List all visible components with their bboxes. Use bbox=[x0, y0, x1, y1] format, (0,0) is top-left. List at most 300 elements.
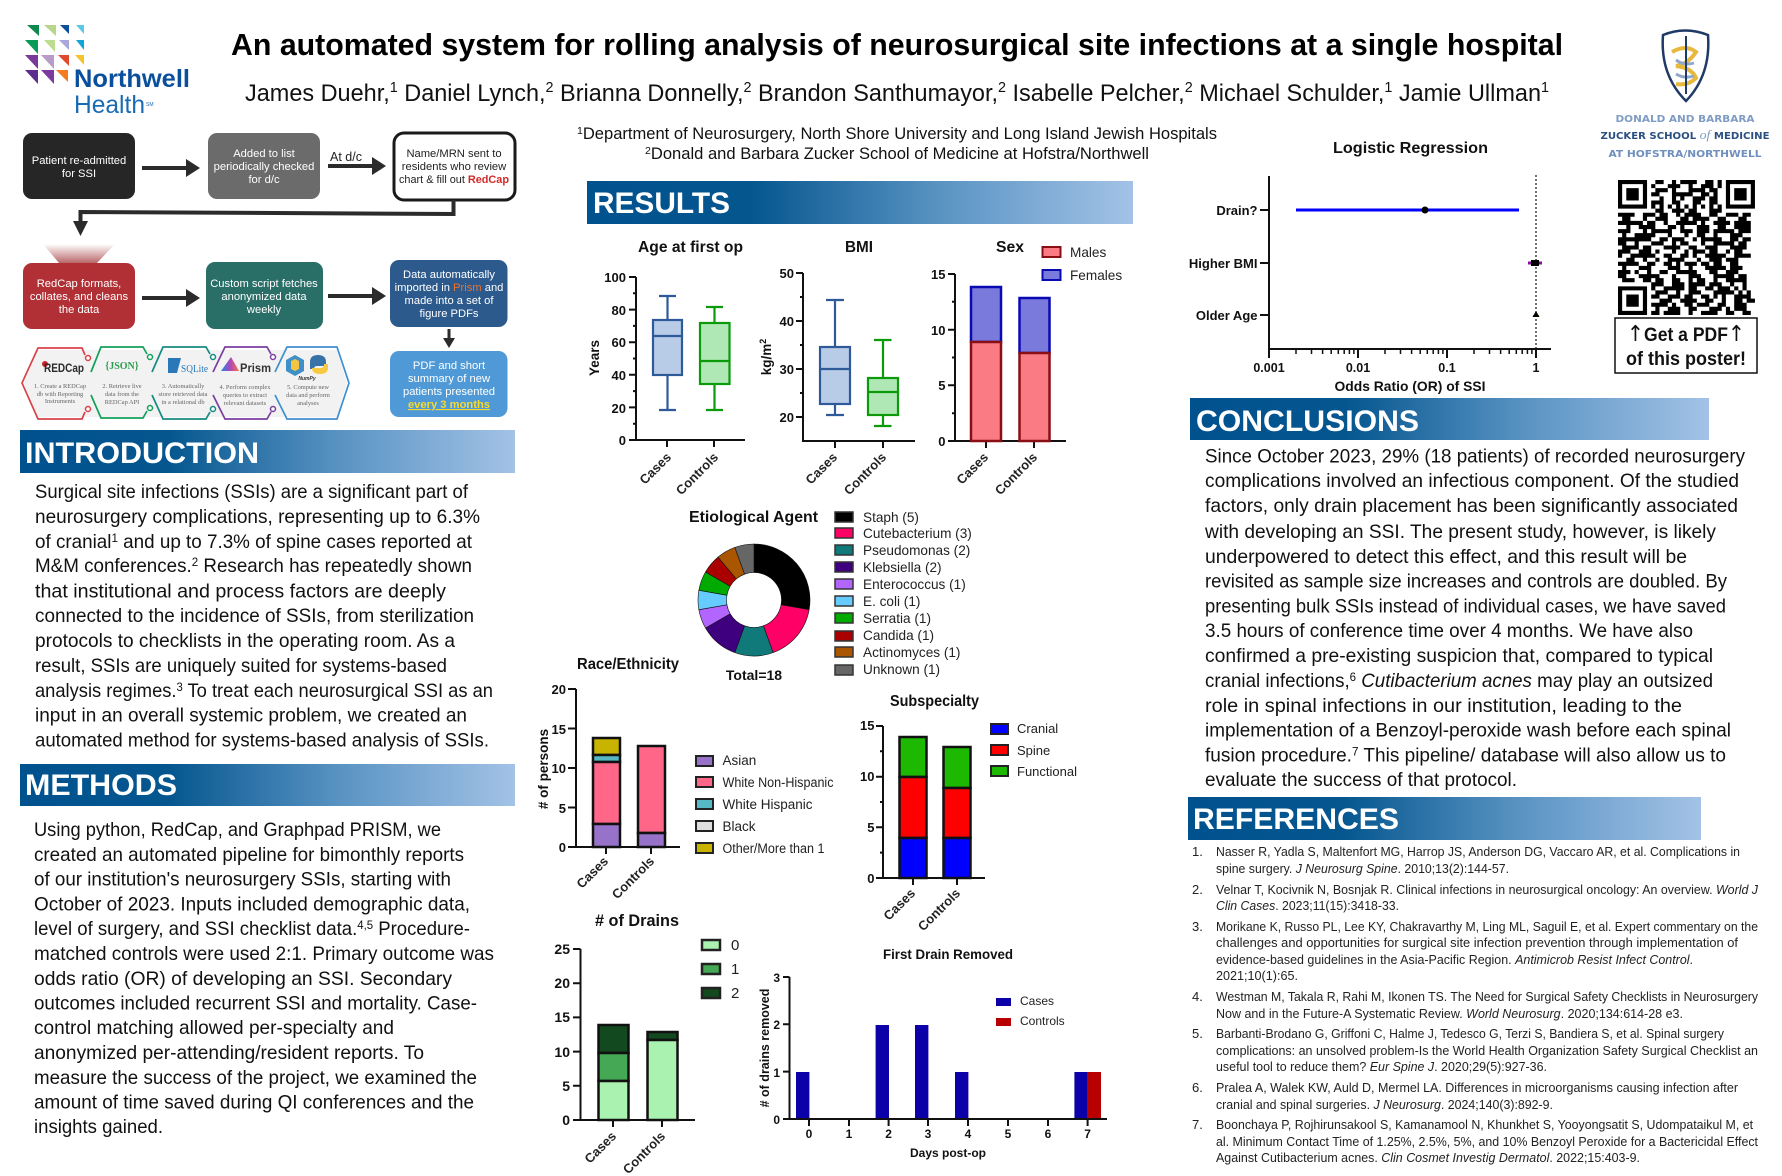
hexagon 5: NumPy and Python: data and perform bbox=[286, 392, 330, 399]
text: references list: 4. bbox=[1192, 989, 1203, 1004]
legend: etiological agents: E. coli (1) bbox=[863, 594, 920, 609]
box: PDF summary bbox=[390, 351, 508, 417]
text: conclusions body: implementation of a Benzoyl-peroxide wash before each spinal bbox=[1205, 720, 1731, 742]
box: Name/MRN sent to residents: residents who review bbox=[402, 161, 507, 173]
text: methods body: outcomes included recurrent SSI and mortality. Case- bbox=[34, 992, 477, 1014]
chart: sex: 0 bbox=[938, 434, 946, 449]
box: Data automatically imported: imported in Prism and bbox=[395, 282, 503, 294]
chart: sex bbox=[931, 239, 1122, 498]
hexagon 1: REDCap: Instruments bbox=[45, 398, 76, 405]
box: Data automatically imported: figure PDFs bbox=[419, 308, 479, 320]
logo: Zucker School of Medicine: ZUCKER SCHOOL of MEDICINE bbox=[1600, 127, 1770, 142]
text: methods body: control matching allowed per-specialty and bbox=[34, 1017, 394, 1039]
chart: logistic regression forest plot bbox=[1189, 140, 1551, 394]
text: conclusions body: cranial infections, bbox=[1205, 670, 1356, 692]
pipeline hexagons bbox=[22, 347, 349, 419]
text: conclusions body: 3.5 hours of conference time over 4 months. We have also bbox=[1205, 620, 1693, 642]
chart: subspecialty: Subspecialty bbox=[890, 693, 979, 710]
text: references list: 2021;10(1):65. bbox=[1216, 968, 1298, 983]
hexagon 5: NumPy and Python: 5. Compute new bbox=[287, 384, 329, 391]
heading: conclusions: CONCLUSIONS bbox=[1196, 405, 1419, 438]
chart: logistic regression forest plot: Odds Ratio (OR) of SSI bbox=[1334, 378, 1486, 394]
chart: sex: 5 bbox=[938, 378, 946, 393]
authors: 2 bbox=[1185, 79, 1193, 96]
text: conclusions body: underpowered to detect this effect, and this result will be bbox=[1205, 546, 1687, 568]
hexagon 2: JSON: data from the bbox=[105, 391, 139, 398]
text: references list: 6. bbox=[1192, 1080, 1203, 1095]
chart: first drain removed: 3 bbox=[925, 1127, 932, 1141]
chart: first drain removed: 0 bbox=[773, 1113, 780, 1127]
hexagon 2: JSON bbox=[91, 347, 152, 418]
chart: age at first op: Controls bbox=[673, 450, 721, 498]
chart: first drain removed: 2 bbox=[885, 1127, 892, 1141]
chart: first drain removed: 1 bbox=[846, 1127, 853, 1141]
text: methods body: odds ratio (OR) of developing an SSI. Secondary bbox=[34, 968, 452, 990]
chart: BMI bbox=[758, 239, 915, 498]
chart: subspecialty: 0 bbox=[867, 871, 874, 886]
chart: logistic regression forest plot: 0.01 bbox=[1346, 361, 1370, 375]
legend: drains: 2 bbox=[731, 985, 739, 1002]
hexagon 4: Prism: Prism bbox=[240, 361, 271, 375]
text: references list: 7. bbox=[1192, 1117, 1203, 1132]
chart: sex: Controls bbox=[992, 450, 1040, 498]
chart: subspecialty: 10 bbox=[860, 769, 874, 784]
text: references list: 1. bbox=[1192, 844, 1203, 859]
chart: logistic regression forest plot: 1 bbox=[1533, 361, 1540, 375]
text: conclusions body: evaluate the success of that protocol. bbox=[1205, 769, 1517, 791]
chart: sex: 15 bbox=[931, 267, 946, 282]
legend: race bbox=[696, 753, 834, 856]
legend: first drain bbox=[996, 994, 1065, 1028]
legend: etiological agents: Staph (5) bbox=[863, 510, 919, 525]
text: methods body: matched controls were used 2:1. Primary outcome was bbox=[34, 943, 494, 965]
hexagon 3: SQLite: store retrieved data bbox=[159, 391, 208, 398]
gradient funnel bbox=[43, 244, 115, 263]
callout: Get a PDF bbox=[1615, 318, 1757, 373]
text: references list: cranial and spinal surgeries. J Neurosurg. 2024;140(3):892-9. bbox=[1216, 1097, 1553, 1112]
authors: 2 bbox=[744, 79, 752, 96]
box: Custom script: anonymized data bbox=[221, 291, 307, 303]
text: references list: 2. bbox=[1192, 882, 1203, 897]
text: introduction body: and up to 7.3% of spine cases reported at bbox=[118, 531, 473, 553]
logo: Zucker School of Medicine bbox=[1600, 30, 1770, 160]
box: Custom script bbox=[206, 262, 323, 329]
callout: Get a PDF: of this poster! bbox=[1626, 349, 1746, 370]
heading: results: RESULTS bbox=[593, 187, 730, 220]
chart: age at first op: 40 bbox=[612, 368, 626, 383]
chart: race/ethnicity: # of persons bbox=[536, 729, 551, 809]
legend: race: White Hispanic bbox=[722, 797, 813, 812]
text: conclusions body: revisited as sample size increases and controls are doubled. By bbox=[1205, 570, 1727, 592]
legend: race: Asian bbox=[722, 753, 756, 768]
text: methods body: Procedure- bbox=[373, 918, 470, 940]
chart: age at first op: Age at first op bbox=[638, 239, 743, 256]
box: Added to list bbox=[208, 133, 320, 199]
box: PDF summary: PDF and short bbox=[413, 360, 486, 372]
text: references list: 3. bbox=[1192, 919, 1203, 934]
legend: subspecialty: Spine bbox=[1017, 743, 1050, 758]
chart: age at first op: 100 bbox=[604, 270, 626, 285]
hexagon 3: SQLite: 3. Automatically bbox=[162, 383, 205, 390]
legend: subspecialty bbox=[991, 721, 1077, 779]
box: Patient re-admitted: for SSI bbox=[62, 168, 96, 180]
affiliations bbox=[577, 125, 1217, 163]
chart: age at first op: Years bbox=[587, 340, 602, 376]
legend: sex: Females bbox=[1070, 268, 1122, 283]
affiliations: Department of Neurosurgery, North Shore University and Long Island Jewish Hospitals bbox=[583, 125, 1217, 143]
chart: age at first op: Cases bbox=[636, 450, 674, 487]
text: introduction body: protocols to checklists in the operating room. As a bbox=[35, 630, 455, 652]
heading: introduction: INTRODUCTION bbox=[25, 437, 259, 470]
text: introduction body: that institutional and process factors are deeply bbox=[35, 580, 446, 602]
text: references list: Against Cutibacterium acnes. Clin Cosmet Investig Dermatol. 2022;15:403-9. bbox=[1216, 1150, 1640, 1165]
chart: race/ethnicity: 20 bbox=[552, 682, 566, 697]
chart: subspecialty: Cases bbox=[880, 886, 918, 923]
chart: number of drains: 0 bbox=[562, 1112, 570, 1128]
authors: 2 bbox=[546, 79, 554, 96]
authors: Daniel Lynch, bbox=[398, 80, 546, 107]
hexagon 4: Prism: relevant datasets bbox=[224, 400, 267, 407]
text: introduction body: 1 bbox=[111, 531, 118, 545]
text: conclusions body: Cutibacterium acnes may play an outsized bbox=[1361, 670, 1721, 692]
chart: race/ethnicity: 10 bbox=[552, 761, 566, 776]
text: references list: Boonchaya P, Rojhirunsakool S, Kamanamool N, Khunkhet S, Yooyongsatit S, Udompataikul M, et bbox=[1216, 1117, 1753, 1132]
hexagon 4: Prism bbox=[213, 347, 276, 419]
hexagon 5: NumPy and Python bbox=[275, 347, 349, 419]
chart: first drain removed bbox=[758, 946, 1107, 1160]
hexagon 1: REDCap: 1. Create a REDCap bbox=[34, 383, 86, 390]
text: references list: challenges and opportunities for surgical site infection prevention through implementation of bbox=[1216, 935, 1738, 950]
chart: first drain removed: 3 bbox=[773, 971, 780, 985]
text: references list: Nasser R, Yadla S, Maltenfort MG, Harrop JS, Anderson DG, Vaccaro AR, et al. Complications in bbox=[1216, 844, 1740, 859]
text: methods body: insights gained. bbox=[34, 1116, 163, 1138]
legend: etiological agents: Klebsiella (2) bbox=[863, 560, 942, 575]
box: PDF summary: summary of new bbox=[408, 373, 491, 385]
text: methods body: amount of time saved during QI conferences and the bbox=[34, 1092, 474, 1114]
text: introduction body: input in an overall systemic problem, we created an bbox=[35, 704, 467, 726]
box: PDF summary: patients presented bbox=[403, 386, 495, 398]
affiliations: 1 bbox=[577, 125, 583, 137]
flowchart bbox=[23, 133, 515, 417]
chart: logistic regression forest plot: 0.001 bbox=[1253, 361, 1285, 375]
heading: introduction bbox=[20, 430, 515, 473]
text: introduction body: automated method for systems-based analysis of SSIs. bbox=[35, 730, 489, 752]
box: PDF summary: every 3 months bbox=[408, 399, 490, 411]
text: introduction body: To treat each neurosurgical SSI as an bbox=[183, 680, 493, 702]
box: RedCap formats: RedCap formats, bbox=[37, 278, 121, 290]
box: Name/MRN sent to residents: chart & fill out RedCap bbox=[399, 174, 509, 186]
text: conclusions body bbox=[1204, 446, 1745, 791]
text: methods body: level of surgery, and SSI checklist data. bbox=[34, 918, 374, 940]
heading: references bbox=[1188, 797, 1701, 840]
text: references list: Now and in the Future-A Systematic Review. World Neurosurg. 2020;134:614-28 e3. bbox=[1216, 1006, 1683, 1021]
box: Added to list: for d/c bbox=[248, 174, 280, 186]
chart: race/ethnicity: Cases bbox=[573, 854, 611, 891]
chart: first drain removed: # of drains removed bbox=[758, 989, 772, 1107]
arrow down bbox=[443, 329, 455, 348]
text: methods body: Using python, RedCap, and Graphpad PRISM, we bbox=[34, 819, 441, 841]
hexagon 5: NumPy and Python: analyses bbox=[297, 400, 319, 407]
title: An automated system for rolling analysis of neurosurgical site infections at a single hospital bbox=[231, 27, 1563, 62]
legend: etiological agents: Actinomyces (1) bbox=[863, 645, 960, 660]
chart: BMI: Cases bbox=[802, 450, 840, 487]
chart: age at first op: 60 bbox=[612, 335, 626, 350]
authors: Brandon Santhumayor, bbox=[752, 80, 998, 107]
chart: race/ethnicity: Race/Ethnicity bbox=[577, 656, 679, 673]
legend: etiological agents: Cutebacterium (3) bbox=[863, 526, 972, 541]
chart: first drain removed: 0 bbox=[806, 1127, 813, 1141]
box: Patient re-admitted: Patient re-admitted bbox=[32, 155, 126, 167]
text: conclusions body: complications involved an infectious component. Of the studied bbox=[1205, 470, 1739, 492]
hexagon 4: Prism: queries to extract bbox=[223, 392, 267, 399]
chart: number of drains bbox=[554, 911, 739, 1176]
chart: number of drains: 20 bbox=[554, 975, 570, 991]
chart: logistic regression forest plot: 0.1 bbox=[1438, 361, 1456, 375]
text: conclusions body: with developing an SSI. The present study, however, is likely bbox=[1204, 521, 1716, 543]
legend: first drain: Cases bbox=[1020, 994, 1054, 1008]
text: methods body: anonymized per-attending/resident reports. To bbox=[34, 1042, 424, 1064]
affiliations: 2 bbox=[645, 145, 651, 157]
chart: age at first op: 80 bbox=[612, 303, 626, 318]
text: introduction body: Surgical site infections (SSIs) are a significant part of bbox=[35, 481, 469, 503]
legend: etiological agents: Serratia (1) bbox=[863, 611, 931, 626]
chart: logistic regression forest plot: Drain? bbox=[1216, 203, 1258, 218]
authors: Brianna Donnelly, bbox=[554, 80, 744, 107]
text: references list: Pralea A, Walek KW, Auld D, Mermel LA. Differences in microorganisms causing infection after bbox=[1216, 1080, 1739, 1095]
text: methods body: of our institution's neurosurgery SSIs, starting with bbox=[34, 868, 451, 890]
legend: first drain: Controls bbox=[1020, 1014, 1065, 1028]
logo: Zucker School of Medicine: AT HOFSTRA/NORTHWELL bbox=[1608, 149, 1762, 160]
chart: sex: Cases bbox=[953, 450, 991, 487]
chart: BMI: Controls bbox=[841, 450, 889, 498]
box: Custom script: Custom script fetches bbox=[210, 278, 318, 290]
authors: 1 bbox=[390, 79, 398, 96]
box: Data automatically imported: Data automatically bbox=[403, 269, 495, 281]
heading: methods: METHODS bbox=[25, 769, 177, 802]
authors: Isabelle Pelcher, bbox=[1006, 80, 1185, 107]
chart: BMI: 30 bbox=[780, 362, 794, 377]
callout: Get a PDF: ↑Get a PDF↑ bbox=[1627, 322, 1745, 347]
text: references list: spine surgery. J Neurosurg Spine. 2010;13(2):144-57. bbox=[1216, 861, 1509, 876]
chart: logistic regression forest plot: Older Age bbox=[1196, 308, 1258, 323]
text: introduction body: neurosurgery complications, representing up to 6.3% bbox=[35, 506, 480, 528]
authors: Michael Schulder, bbox=[1193, 80, 1384, 107]
chart: age at first op: 20 bbox=[612, 401, 626, 416]
box: Custom script: weekly bbox=[246, 304, 282, 316]
legend: race: Black bbox=[722, 819, 756, 834]
hexagon 1: REDCap bbox=[22, 348, 90, 419]
chart: first drain removed: 7 bbox=[1084, 1127, 1091, 1141]
chart: BMI: BMI bbox=[845, 239, 873, 256]
text: introduction body: M&M conferences. bbox=[35, 555, 198, 577]
box: RedCap formats: the data bbox=[59, 304, 100, 316]
text: conclusions body: This pipeline/ database will also allow us to bbox=[1358, 744, 1726, 766]
text: conclusions body: fusion procedure. bbox=[1205, 744, 1356, 766]
box: Name/MRN sent to residents: Name/MRN sent to bbox=[406, 148, 502, 160]
hexagon 4: Prism: 4. Perform complex bbox=[220, 384, 271, 391]
chart: subspecialty: 5 bbox=[867, 820, 874, 835]
chart: sex: 10 bbox=[931, 323, 946, 338]
box: Data automatically imported: made into a set of bbox=[405, 295, 494, 307]
heading: methods bbox=[20, 764, 515, 806]
legend: etiological agents: Candida (1) bbox=[863, 628, 934, 643]
chart: number of drains: Controls bbox=[620, 1129, 668, 1176]
QR code bbox=[1618, 182, 1755, 313]
text: conclusions body: role in spinal infections in our institution, leading to the bbox=[1205, 695, 1682, 717]
box: RedCap formats: collates, and cleans bbox=[30, 291, 129, 303]
hexagon 1: REDCap: db with Reporting bbox=[37, 391, 84, 398]
chart: logistic regression forest plot: Higher BMI bbox=[1189, 256, 1258, 271]
text: introduction body: result, SSIs are uniquely suited for systems-based bbox=[35, 655, 447, 677]
text: methods body: created an automated pipeline for bimonthly reports bbox=[34, 844, 464, 866]
chart: etiological agent donut: Total=18 bbox=[726, 667, 782, 683]
hexagon 2: JSON: REDCap API bbox=[105, 399, 139, 406]
legend: etiological agents bbox=[835, 510, 972, 677]
chart: first drain removed: First Drain Removed bbox=[883, 946, 1013, 962]
chart: age at first op bbox=[587, 239, 745, 498]
text: references list: Barbanti-Brodano G, Griffoni C, Halme J, Tedesco G, Terzi S, Bandiera S, et al. Spinal surgery bbox=[1216, 1026, 1724, 1041]
chart: first drain removed: 1 bbox=[773, 1066, 780, 1080]
chart: number of drains: Cases bbox=[581, 1129, 619, 1166]
text: references list: complications: an unsolved problem-Is the World Health Organization Safety Surgical Checklist an bbox=[1216, 1043, 1758, 1058]
text: introduction body bbox=[35, 481, 493, 752]
text: conclusions body: 6 bbox=[1350, 670, 1356, 684]
chart: sex: Sex bbox=[996, 239, 1024, 256]
chart: subspecialty bbox=[860, 693, 1077, 934]
legend: sex bbox=[1042, 245, 1122, 283]
chart: BMI: 2 bbox=[758, 339, 768, 344]
chart: BMI: 50 bbox=[780, 266, 794, 281]
authors: 1 bbox=[1384, 79, 1392, 96]
hexagon 2: JSON: {JSON} bbox=[105, 361, 139, 372]
box: Data automatically imported bbox=[390, 260, 508, 327]
text: methods body: measure the success of the project, we examined the bbox=[34, 1067, 477, 1089]
chart: BMI: kg/m bbox=[759, 344, 774, 375]
text: references list: evidence-based guidelines in the Asia-Pacific Region. Antimicrob Resist Infect Control. bbox=[1216, 952, 1693, 967]
text: conclusions body: presenting bulk SSIs instead of individual cases, we have saved bbox=[1205, 596, 1726, 618]
text: references list: Morikane K, Russo PL, Lee KY, Chakravarthy M, Ling ML, Saguil E, et al. Expert commentary on the bbox=[1216, 919, 1758, 934]
arrow bbox=[142, 159, 200, 177]
text: conclusions body: factors, only drain placement has been significantly associated bbox=[1205, 495, 1738, 517]
arrow label: At d/c: At d/c bbox=[330, 150, 362, 164]
arrow bbox=[328, 287, 386, 305]
text: references list: useful tool to reduce them? Eur Spine J. 2020;29(5):927-36. bbox=[1216, 1059, 1547, 1074]
text: conclusions body: Since October 2023, 29% (18 patients) of recorded neurosurgery bbox=[1205, 446, 1745, 468]
authors: 2 bbox=[998, 79, 1006, 96]
chart: logistic regression forest plot: Logistic Regression bbox=[1333, 140, 1488, 157]
text: references list: al. Minimum Contact Time of 1.25%, 2.5%, 5%, and 10% Benzoyl Peroxide for a Bactericidal Effect bbox=[1216, 1134, 1758, 1149]
text: references list: Velnar T, Kocivnik N, Bosnjak R. Clinical infections in neurosurgical oncology: An overview. World J bbox=[1216, 882, 1758, 897]
text: introduction body: Research has repeatedly shown bbox=[198, 555, 472, 577]
chart: race/ethnicity: Controls bbox=[609, 854, 657, 902]
legend: drains: 0 bbox=[731, 937, 739, 954]
heading: results bbox=[587, 181, 1133, 224]
chart: number of drains: 25 bbox=[554, 941, 570, 957]
box: Added to list: Added to list bbox=[233, 148, 296, 160]
chart: number of drains: 5 bbox=[562, 1078, 570, 1094]
box: Name/MRN sent to residents bbox=[394, 133, 515, 200]
chart: number of drains: 10 bbox=[554, 1044, 570, 1060]
hexagon 5: NumPy and Python: NumPy bbox=[298, 376, 316, 382]
chart: number of drains: # of Drains bbox=[595, 911, 679, 930]
authors: Jamie Ullman bbox=[1392, 80, 1541, 107]
chart: number of drains: 15 bbox=[554, 1009, 570, 1025]
chart: etiological agent donut: Etiological Agent bbox=[689, 509, 818, 526]
chart: first drain removed: 6 bbox=[1045, 1127, 1052, 1141]
box: RedCap formats bbox=[23, 263, 135, 329]
arrow bbox=[142, 289, 200, 307]
legend: etiological agents: Enterococcus (1) bbox=[863, 577, 966, 592]
affiliations: Donald and Barbara Zucker School of Medicine at Hofstra/Northwell bbox=[651, 145, 1149, 163]
chart: first drain removed: 2 bbox=[773, 1018, 780, 1032]
heading: references: REFERENCES bbox=[1193, 803, 1399, 836]
arrow label: At d/c bbox=[328, 150, 386, 175]
legend: sex: Males bbox=[1070, 245, 1106, 260]
hexagon 2: JSON: 2. Retrieve live bbox=[102, 383, 142, 390]
hexagon 3: SQLite: SQLite bbox=[181, 364, 208, 375]
logo: Northwell Health: SM bbox=[146, 102, 154, 108]
chart: subspecialty: 15 bbox=[860, 718, 874, 733]
legend: subspecialty: Cranial bbox=[1017, 721, 1058, 736]
box: Patient re-admitted bbox=[23, 133, 135, 199]
box: Added to list: periodically checked bbox=[214, 161, 314, 173]
hexagon 1: REDCap: REDCap bbox=[44, 361, 84, 375]
chart: race/ethnicity: 0 bbox=[559, 840, 566, 855]
chart: BMI: 20 bbox=[780, 410, 794, 425]
chart: first drain removed: Days post-op bbox=[910, 1146, 986, 1160]
text: introduction body: 2 bbox=[192, 555, 198, 569]
text: introduction body: 3 bbox=[176, 680, 183, 694]
heading: conclusions bbox=[1190, 398, 1709, 440]
text: references list bbox=[1192, 844, 1758, 1165]
chart: first drain removed: 4 bbox=[965, 1127, 972, 1141]
legend: race: White Non-Hispanic bbox=[722, 775, 834, 790]
hexagon 3: SQLite: in a relational db bbox=[161, 399, 205, 406]
text: methods body: 4,5 bbox=[357, 918, 373, 932]
logo: Zucker School of Medicine: DONALD AND BARBARA bbox=[1616, 114, 1755, 125]
text: introduction body: of cranial bbox=[35, 531, 114, 553]
chart: etiological agent donut bbox=[689, 509, 972, 683]
authors: 1 bbox=[1541, 79, 1549, 96]
legend: race: Other/More than 1 bbox=[722, 841, 824, 856]
legend: drains: 1 bbox=[731, 961, 739, 978]
chart: race/ethnicity bbox=[536, 656, 834, 902]
text: conclusions body: 7 bbox=[1352, 744, 1359, 758]
legend: subspecialty: Functional bbox=[1017, 764, 1077, 779]
logo: Northwell Health bbox=[25, 25, 190, 119]
chart: first drain removed: 5 bbox=[1005, 1127, 1012, 1141]
text: introduction body: connected to the incidence of SSIs, from sterilization bbox=[35, 605, 474, 627]
legend: etiological agents: Unknown (1) bbox=[863, 662, 940, 677]
chart: subspecialty: Controls bbox=[915, 886, 963, 934]
text: methods body bbox=[34, 819, 494, 1138]
chart: BMI: 40 bbox=[780, 314, 794, 329]
legend: drains bbox=[702, 937, 739, 1002]
chart: race/ethnicity: 5 bbox=[559, 801, 566, 816]
text: references list: Clin Cases. 2023;11(15):3418-33. bbox=[1216, 898, 1399, 913]
text: references list: Westman M, Takala R, Rahi M, Ikonen TS. The Need for Surgical Safety Checklists in Neurosurgery bbox=[1216, 989, 1758, 1004]
hexagon 3: SQLite bbox=[152, 347, 216, 419]
legend: etiological agents: Pseudomonas (2) bbox=[863, 543, 970, 558]
authors: James Duehr, bbox=[245, 80, 396, 107]
logo: Northwell Health: Northwell bbox=[74, 65, 190, 93]
chart: race/ethnicity: 15 bbox=[552, 722, 566, 737]
text: references list: 5. bbox=[1192, 1026, 1203, 1041]
text: methods body: October of 2023. Inputs included demographic data, bbox=[34, 894, 470, 916]
text: conclusions body: confirmed a pre-existing suspicion that, compared to typical bbox=[1205, 645, 1713, 667]
connector arrow bbox=[73, 200, 454, 236]
logo: Northwell Health: Health bbox=[74, 91, 145, 119]
